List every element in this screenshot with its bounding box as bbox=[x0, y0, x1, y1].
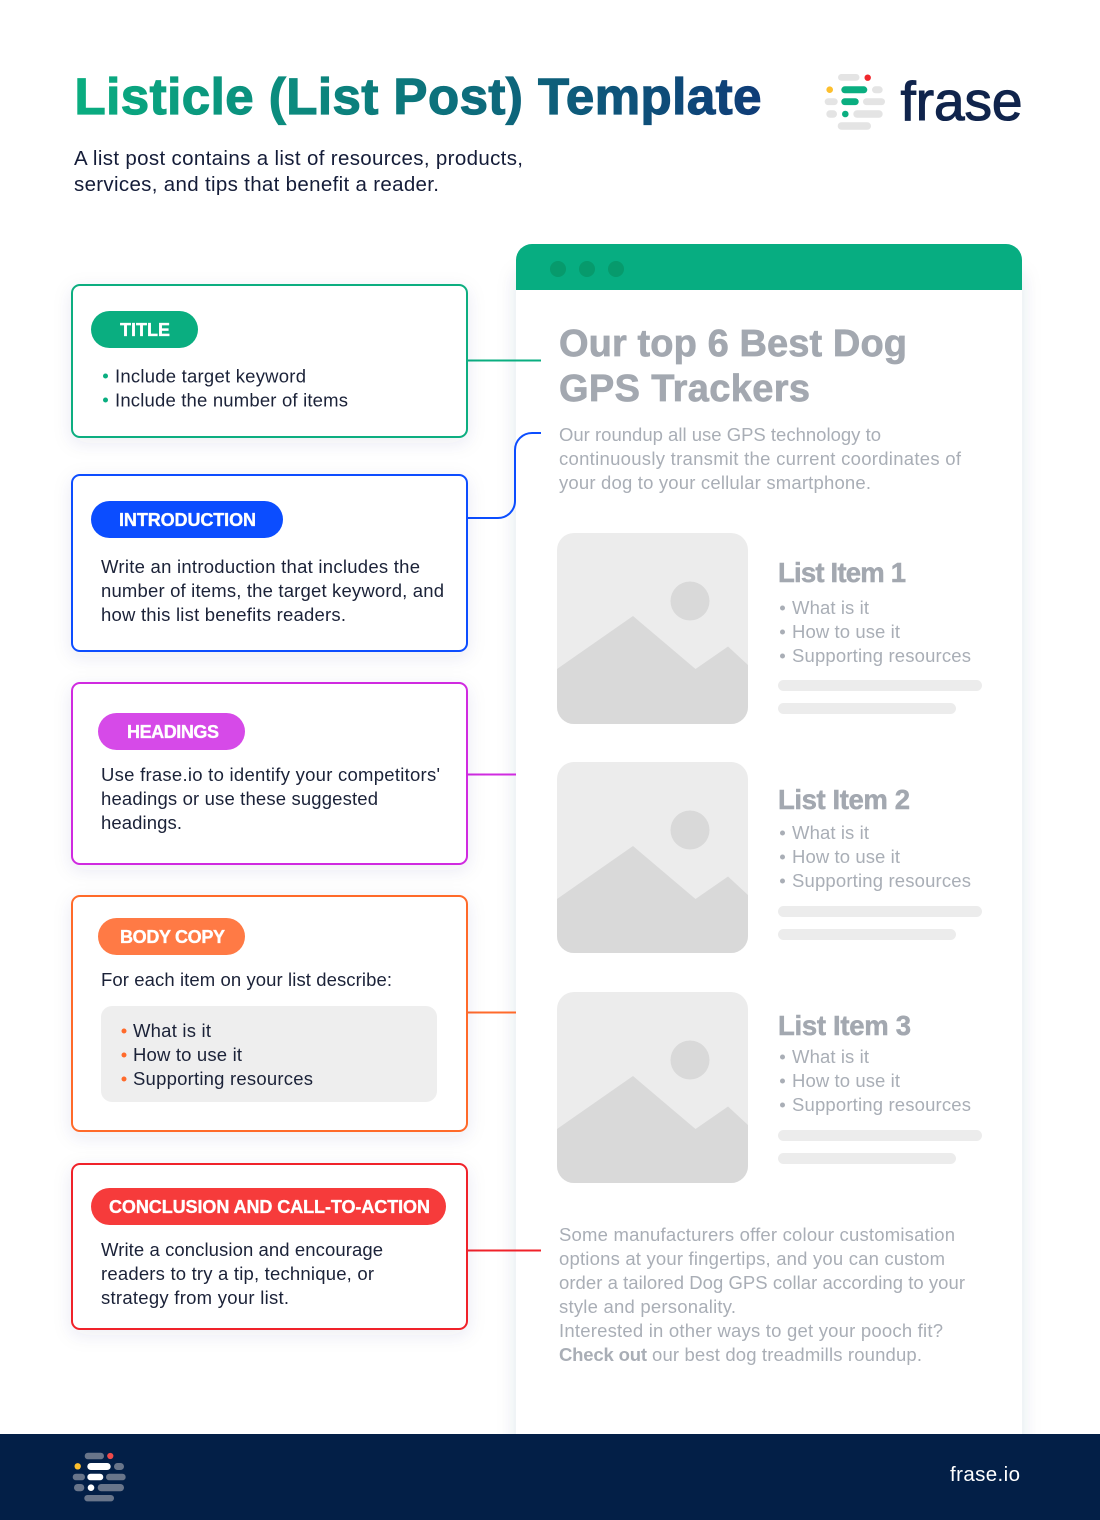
checklist box bbox=[101, 1006, 437, 1102]
panel: body copy guidance bbox=[72, 896, 467, 1131]
list item 2: What is it bbox=[792, 822, 869, 843]
article conclusion: Check out bbox=[559, 1344, 647, 1365]
list item 3: Supporting resources bbox=[792, 1094, 971, 1115]
browser title bar bbox=[516, 244, 1022, 290]
list item 3: List Item 3 bbox=[778, 1010, 911, 1041]
subtitle: A list post contains a list of resources, products, bbox=[74, 147, 523, 170]
panel: introduction guidance: number of items, the target keyword, and bbox=[101, 580, 444, 601]
checklist box: What is it bbox=[133, 1020, 211, 1041]
list item 2 bbox=[557, 762, 982, 953]
footer bbox=[0, 1434, 1100, 1520]
panel: conclusion guidance: readers to try a tip, technique, or bbox=[101, 1263, 374, 1284]
pill: headings bbox=[98, 713, 245, 750]
panel: headings guidance bbox=[72, 683, 467, 864]
panel: browser mockup bbox=[516, 244, 1022, 1460]
pill: body copy: BODY COPY bbox=[120, 927, 225, 947]
image placeholder 3 bbox=[557, 992, 748, 1183]
list item 2: Supporting resources bbox=[792, 870, 971, 891]
list item 2: How to use it bbox=[792, 846, 900, 867]
panel: title guidance: Include the number of items bbox=[115, 390, 348, 410]
list item 1: Supporting resources bbox=[792, 645, 971, 666]
connector: conclusion bbox=[467, 1250, 541, 1252]
panel: conclusion guidance: strategy from your list. bbox=[101, 1287, 289, 1308]
panel: headings guidance: Use frase.io to identify your competitors' bbox=[101, 764, 440, 785]
article conclusion: order a tailored Dog GPS collar according to your bbox=[559, 1272, 965, 1293]
pill: title bbox=[91, 311, 198, 348]
panel: body copy guidance: For each item on your list describe: bbox=[101, 969, 392, 990]
logo: frase bbox=[825, 70, 1022, 132]
pill: title: TITLE bbox=[120, 320, 170, 340]
logo: frase: frase bbox=[900, 70, 1022, 132]
footer logo bbox=[73, 1453, 126, 1501]
list item 2: List Item 2 bbox=[778, 784, 910, 815]
image placeholder 2 bbox=[557, 762, 748, 953]
panel: conclusion guidance: Write a conclusion and encourage bbox=[101, 1239, 383, 1260]
article conclusion: style and personality. bbox=[559, 1296, 736, 1317]
list item 1: How to use it bbox=[792, 621, 900, 642]
image placeholder 1 bbox=[557, 533, 748, 724]
pill: conclusion: CONCLUSION AND CALL-TO-ACTION bbox=[109, 1197, 430, 1217]
article introduction: your dog to your cellular smartphone. bbox=[559, 472, 871, 493]
subtitle: services, and tips that benefit a reader. bbox=[74, 173, 439, 196]
panel: title guidance bbox=[72, 285, 467, 437]
connector: introduction bbox=[467, 433, 541, 518]
connector: headings bbox=[467, 774, 516, 776]
subtitle bbox=[74, 147, 523, 196]
checklist box: Supporting resources bbox=[133, 1068, 313, 1089]
title: Listicle (List Post) Template bbox=[74, 68, 762, 125]
article introduction: Our roundup all use GPS technology to bbox=[559, 424, 881, 445]
list item 3: How to use it bbox=[792, 1070, 900, 1091]
pill: body copy bbox=[98, 918, 245, 955]
panel: introduction guidance: how this list benefits readers. bbox=[101, 604, 346, 625]
footer url: frase.io bbox=[950, 1463, 1020, 1486]
list item 1: List Item 1 bbox=[778, 557, 906, 588]
article conclusion bbox=[559, 1224, 965, 1365]
article conclusion: Some manufacturers offer colour customisation bbox=[559, 1224, 955, 1245]
panel: conclusion guidance bbox=[72, 1164, 467, 1329]
connector: body copy bbox=[467, 1012, 516, 1014]
article heading: Our top 6 Best Dog bbox=[559, 323, 907, 365]
checklist box: How to use it bbox=[133, 1044, 242, 1065]
panel: introduction guidance bbox=[72, 475, 467, 651]
list item 3 bbox=[557, 992, 982, 1183]
list item 1: What is it bbox=[792, 597, 869, 618]
panel: title guidance: Include target keyword bbox=[115, 366, 306, 386]
browser page body bbox=[516, 270, 1022, 1460]
list item 1 bbox=[557, 533, 982, 724]
article introduction: continuously transmit the current coordinates of bbox=[559, 448, 962, 469]
article conclusion: Interested in other ways to get your pooch fit? bbox=[559, 1320, 943, 1341]
article conclusion: our best dog treadmills roundup. bbox=[652, 1344, 922, 1365]
article heading bbox=[559, 323, 907, 410]
panel: headings guidance: headings. bbox=[101, 812, 182, 833]
article introduction bbox=[559, 424, 962, 493]
panel: headings guidance: headings or use these suggested bbox=[101, 788, 378, 809]
pill: introduction: INTRODUCTION bbox=[119, 510, 256, 530]
list item 3: What is it bbox=[792, 1046, 869, 1067]
connector: title bbox=[467, 360, 541, 362]
article heading: GPS Trackers bbox=[559, 368, 810, 410]
pill: conclusion bbox=[91, 1188, 446, 1225]
pill: introduction bbox=[91, 501, 283, 538]
panel: introduction guidance: Write an introduction that includes the bbox=[101, 556, 420, 577]
article conclusion: options at your fingertips, and you can custom bbox=[559, 1248, 945, 1269]
pill: headings: HEADINGS bbox=[127, 722, 219, 742]
